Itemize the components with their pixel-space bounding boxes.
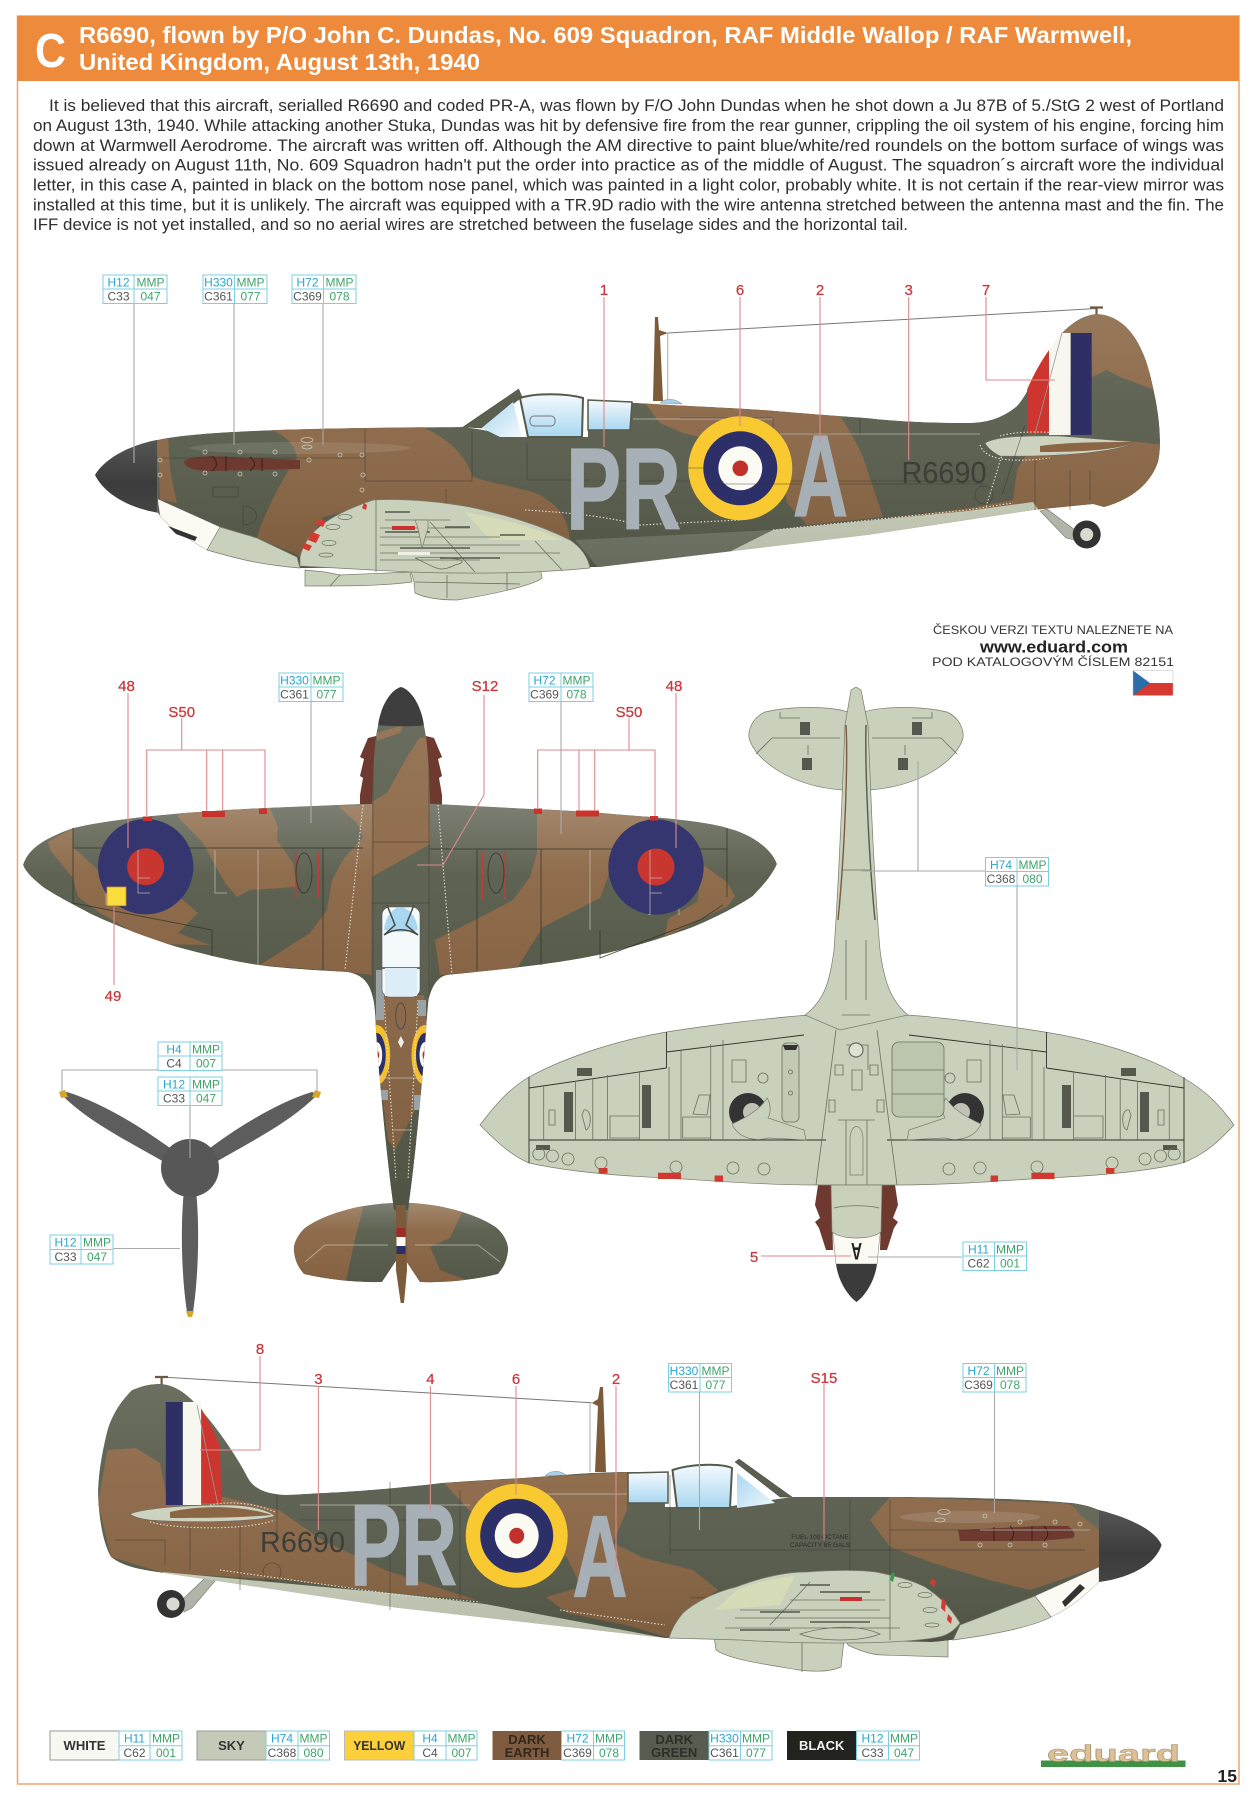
code box H72: C369 (964, 1378, 993, 1392)
code box H330: MMP (312, 674, 340, 688)
code box H72: H72 (967, 1364, 990, 1378)
belly (163, 1572, 665, 1638)
callouts: propeller (50, 1042, 317, 1264)
legend: sky: SKY (218, 1738, 245, 1753)
legend: dark green: DARK (655, 1732, 694, 1747)
rudder (396, 1205, 407, 1303)
legend: sky: 080 (303, 1746, 324, 1760)
spinner (161, 1139, 219, 1197)
legend: dark earth: MMP (595, 1732, 623, 1746)
legend: white: C62 (123, 1746, 146, 1760)
callouts: right side profile: 2 (612, 1371, 620, 1388)
main wheel (729, 1093, 806, 1140)
code box H11 (963, 1242, 1026, 1270)
roundel (466, 1484, 568, 1588)
code box H74: MMP (1018, 858, 1046, 872)
title: R6690, flown by P/O John C. Dundas, No. 609 Squadron, RAF Middle Wallop / RAF Warmwell, (79, 22, 1132, 48)
under-wing radiators (305, 566, 542, 600)
legend: dark green: GREEN (651, 1745, 697, 1760)
central fuselage panels (816, 1030, 897, 1208)
stencil numbers (600, 282, 1055, 460)
code box H72 (292, 275, 356, 304)
legend: white: 001 (156, 1746, 176, 1760)
aircraft: top view (23, 680, 777, 1303)
callouts: underside view: 5 (750, 1249, 758, 1266)
legend: black: C33 (861, 1746, 884, 1760)
code box H72: C369 (293, 290, 322, 304)
squadron code PR-A: A (793, 411, 848, 541)
code box H4: H4 (166, 1042, 182, 1056)
exhaust stubs (184, 456, 300, 471)
fuselage camouflage (371, 687, 430, 1210)
cockpit canopy (382, 905, 420, 997)
legend: yellow: 007 (451, 1746, 472, 1760)
Czech version note (932, 624, 1174, 669)
code box H12: H12 (163, 1078, 185, 1092)
legend: yellow: MMP (448, 1732, 476, 1746)
code box H11: MMP (996, 1242, 1024, 1256)
mirrored right half wing detail (887, 1032, 1184, 1175)
code box H12 (158, 1077, 222, 1106)
callouts: top view: S12 (472, 678, 498, 695)
legend: white: H11 (124, 1732, 145, 1746)
code box H330: C361 (204, 290, 233, 304)
Czech version note: www.eduard.com (979, 638, 1128, 656)
legend: dark green: H330 (710, 1732, 739, 1746)
legend: dark green: C361 (710, 1746, 739, 1760)
description text: issued already on August 11th, No. 609 Squadron hadn't put the order into practice as of the middle of August. The squadron´s aircraft wore the individual (33, 156, 1224, 174)
stencil numbers: 6 (736, 282, 744, 299)
code box H12 lower: 047 (87, 1250, 107, 1264)
squadron code PR-A (350, 1480, 628, 1622)
antenna mast and wire (653, 307, 1103, 402)
code box H12 lower: MMP (83, 1236, 111, 1250)
panel lines (157, 418, 1090, 530)
code box H11: 001 (1000, 1256, 1020, 1270)
code box H72: MMP (562, 674, 590, 688)
blades (61, 1092, 170, 1162)
code box H11: C62 (967, 1256, 990, 1270)
code box H4: MMP (192, 1042, 220, 1056)
code box H12 lower: H12 (54, 1236, 77, 1250)
exhausts (815, 1185, 898, 1250)
tail wheel (1040, 509, 1101, 548)
code box H12: 047 (196, 1092, 216, 1106)
code box H74 (986, 858, 1048, 886)
code box H4: C4 (166, 1056, 182, 1070)
callouts: top view: 48 (118, 678, 135, 695)
spinner (95, 440, 158, 513)
legend: sky: C368 (268, 1746, 297, 1760)
aircraft: underside view (480, 687, 1234, 1302)
code box H330 (279, 673, 343, 702)
legend: sky (197, 1731, 330, 1760)
callouts: left side profile (103, 275, 1055, 463)
Czech version note: POD KATALOGOVÝM ČÍSLEM 82151 (932, 656, 1174, 669)
legend: sky: MMP (300, 1732, 328, 1746)
code box H72: 078 (566, 688, 587, 702)
description text: letter, in this case A, painted in black on the bottom nose panel, which was painted in a light color, probably white. It is not certain if the rear-view mirror was (33, 176, 1224, 194)
code box H330: 077 (240, 290, 261, 304)
fuselage camouflage (158, 310, 1165, 572)
brown nose and centre (158, 437, 177, 503)
code box H4: 007 (196, 1056, 216, 1070)
code box H12: MMP (192, 1078, 220, 1092)
code box H12 lower (50, 1235, 113, 1264)
squadron code PR-A (566, 411, 848, 554)
squadron code PR-A: PR (566, 424, 681, 554)
legend: black: MMP (890, 1732, 918, 1746)
legend: dark earth: C369 (563, 1746, 592, 1760)
code box H72 (963, 1364, 1026, 1392)
colour codes (103, 275, 356, 463)
code box H12: 047 (140, 290, 161, 304)
under-fuselage dark gradient (575, 530, 773, 570)
code box H4 (158, 1042, 222, 1070)
fuselage stencil: CAPACITY 85 GALS (790, 1542, 851, 1549)
code box H12 (103, 275, 167, 304)
icon: Czech flag (1133, 670, 1173, 696)
legend: dark earth: H72 (566, 1732, 589, 1746)
red wing markings (143, 808, 658, 821)
code box H72: 078 (1000, 1378, 1020, 1392)
red underside markings (599, 1168, 1114, 1182)
under-wing radiators (714, 1636, 948, 1672)
tail wheel (157, 1578, 216, 1618)
legend: dark earth: 078 (599, 1746, 619, 1760)
yellow tips (59, 1090, 321, 1317)
left half wing detail (529, 1032, 826, 1175)
lower cowl panels (953, 1567, 1099, 1640)
legend: dark green: 077 (746, 1746, 766, 1760)
roundel (688, 416, 985, 520)
wing (480, 1015, 1234, 1185)
lower cowl panels (158, 499, 300, 568)
serial R6690: R6690 (902, 455, 986, 490)
stencil numbers: 1 (600, 282, 608, 299)
canopy (545, 1459, 792, 1508)
fuselage stencil (790, 1534, 851, 1549)
wing with camouflage (23, 804, 777, 1010)
fuselage stencil: FUEL 100 OCTANE (791, 1534, 849, 1541)
code box H330: H330 (204, 276, 233, 290)
wing panel lines (73, 805, 727, 975)
legend: white: WHITE (64, 1738, 106, 1753)
individual letter A, upside-down: A (851, 1237, 862, 1264)
tailplane (294, 1203, 508, 1282)
fin flash (166, 1402, 222, 1505)
description text: IFF device is not yet installed, and so no aerial wires are stretched between the fuselage sides and the horizontal tail. (33, 215, 908, 234)
callouts: top view: S50 (168, 704, 195, 721)
colour legend (50, 1731, 920, 1760)
code box H330 (203, 275, 267, 304)
section letter: C (35, 25, 66, 78)
title: United Kingdom, August 13th, 1940 (79, 49, 480, 75)
tailplane (980, 432, 1135, 460)
callouts: top view (105, 673, 682, 1005)
callouts: top view: 49 (105, 988, 121, 1005)
exhausts (360, 736, 442, 806)
legend: yellow: H4 (422, 1732, 438, 1746)
code box H330: C361 (670, 1378, 699, 1392)
code box H72: MMP (996, 1364, 1024, 1378)
code box H12: MMP (136, 276, 164, 290)
callouts: top view: S50 (616, 704, 642, 721)
legend: black (787, 1731, 920, 1760)
fin flash (1027, 333, 1092, 435)
callouts: right side profile: S15 (811, 1370, 837, 1387)
callouts: right side profile: 4 (426, 1371, 435, 1388)
code box H72: C369 (530, 688, 559, 702)
title (79, 22, 1132, 75)
code box H12 lower: C33 (54, 1250, 77, 1264)
stencil numbers: 2 (816, 282, 824, 299)
left radiator fairing (782, 1043, 799, 1122)
yellow gas patch (107, 887, 126, 906)
code box H72: 078 (329, 290, 350, 304)
code box H330: MMP (702, 1364, 730, 1378)
right oil cooler fairing (892, 1042, 944, 1117)
page number: 15 (1218, 1766, 1237, 1786)
legend: yellow: YELLOW (353, 1738, 406, 1753)
callouts: right side profile (200, 1341, 1026, 1572)
propeller (59, 1090, 321, 1317)
code box H12: C33 (107, 290, 130, 304)
callouts: right side profile: 6 (512, 1371, 520, 1388)
legend: sky: H74 (271, 1732, 293, 1746)
description text (33, 96, 1224, 234)
description text: installed at this time, but it is unlikely. The aircraft was equipped with a TR.9D radio with the wire antenna stretched between the antenna mast and the fin. The (33, 196, 1224, 214)
code box H12: H12 (107, 276, 130, 290)
canopy (463, 389, 682, 437)
callouts: underside view (750, 761, 1048, 1270)
description text: It is believed that this aircraft, serialled R6690 and coded PR-A, was flown by F/O John Dundas when he shot down a Ju 87B of 5./StG 2 west of Portland (49, 96, 1224, 115)
legend: dark earth: EARTH (505, 1745, 549, 1760)
code box H330: H330 (280, 674, 309, 688)
legend: white (50, 1731, 182, 1760)
legend: dark earth: DARK (508, 1732, 546, 1747)
description text: down at Warmwell Aerodrome. The aircraft was written off. Although the AM directive to paint blue/white/red roundels on the bottom surface of wings was (33, 136, 1224, 155)
fuselage (805, 687, 908, 1030)
exhaust stubs (958, 1526, 1074, 1541)
description text: on August 13th, 1940. While attacking another Stuka, Dundas was hit by defensive fire from the rear gunner, crippling the oil system of his engine, forcing him (33, 116, 1224, 135)
legend: dark earth (492, 1731, 624, 1760)
legend: dark green (640, 1731, 772, 1760)
eduard logo: eduard (1047, 1740, 1180, 1766)
legend: black: H12 (861, 1732, 884, 1746)
code box H12: C33 (163, 1092, 185, 1106)
antenna mast and wire (155, 1376, 606, 1472)
fuselage camouflage (98, 1384, 1099, 1642)
stencil numbers: 3 (905, 282, 913, 299)
header banner (17, 16, 1239, 81)
squadron code PR-A: A (572, 1492, 628, 1622)
wing (300, 500, 590, 573)
code box H72: H72 (533, 674, 556, 688)
code box H330: 077 (316, 688, 337, 702)
panel lines (115, 1475, 1090, 1625)
code box H72 (529, 673, 593, 702)
code box H74: H74 (990, 858, 1012, 872)
spinner (1099, 1510, 1162, 1582)
legend: yellow: C4 (422, 1746, 438, 1760)
callouts: right side profile: 8 (256, 1341, 264, 1358)
legend: black: BLACK (799, 1738, 845, 1753)
code box H330 (668, 1364, 732, 1392)
nose (831, 1185, 882, 1302)
cowl highlight (190, 442, 410, 454)
belly (730, 502, 1038, 552)
wing (669, 1570, 960, 1643)
legend: yellow (344, 1731, 477, 1760)
aircraft: right side profile (98, 1376, 1162, 1672)
code box H11: H11 (968, 1242, 989, 1256)
legend: white: MMP (152, 1732, 180, 1746)
code box H330: MMP (236, 276, 264, 290)
code box H74: 080 (1022, 872, 1043, 886)
code box H72: H72 (296, 276, 319, 290)
Czech version note: ČESKOU VERZI TEXTU NALEZNETE NA (933, 624, 1173, 637)
callouts: right side profile: 3 (314, 1371, 323, 1388)
fuselage roundels (376, 1025, 426, 1084)
tailplane (130, 1503, 275, 1528)
code box H330: H330 (670, 1364, 699, 1378)
legend: black: 047 (894, 1746, 914, 1760)
tailplane (749, 708, 963, 790)
stencil numbers: 7 (982, 282, 990, 299)
code box H74: C368 (987, 872, 1016, 886)
wing roundels (98, 819, 704, 915)
eduard logo (1041, 1740, 1186, 1767)
aircraft: left side profile (95, 307, 1165, 600)
code box H330: 077 (705, 1378, 726, 1392)
code box H330: C361 (280, 688, 309, 702)
legend: dark green: MMP (742, 1732, 770, 1746)
serial R6690: R6690 (260, 1527, 345, 1559)
code box H72: MMP (326, 276, 354, 290)
squadron code PR-A: PR (350, 1480, 457, 1610)
callouts: top view: 48 (666, 678, 682, 695)
